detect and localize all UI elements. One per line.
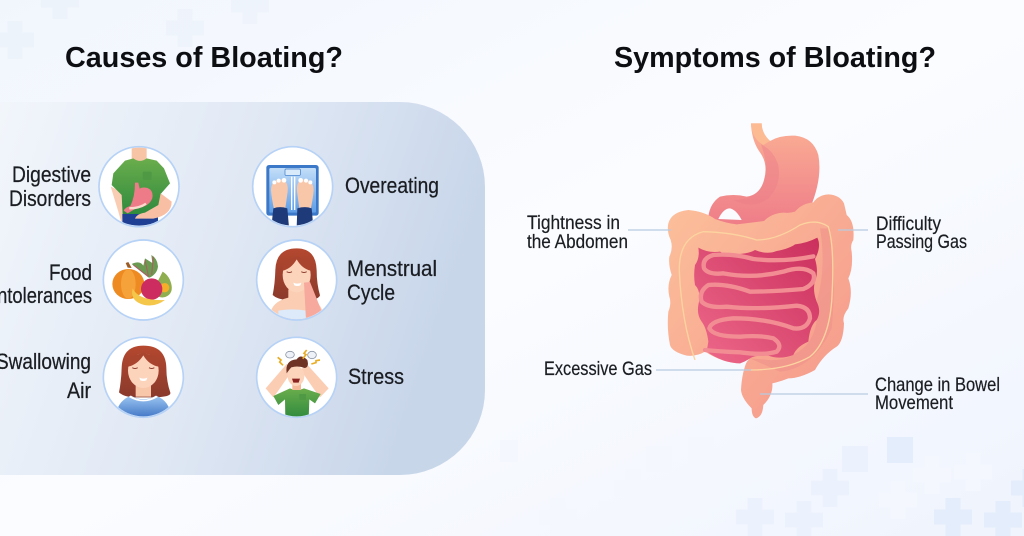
label: menstrual cycle <box>347 256 437 305</box>
small intestine <box>701 255 814 354</box>
label: food intolerances: Food <box>49 260 92 285</box>
large intestine <box>668 194 854 418</box>
panel: causes background <box>0 102 485 475</box>
icon: food <box>103 240 183 320</box>
label: tightness in the abdomen: Tightness in <box>527 212 620 234</box>
heading: causes: Causes of Bloating? <box>65 42 343 74</box>
label: swallowing air <box>0 349 91 403</box>
colon inner shading <box>750 228 834 372</box>
icon: menstrual cycle woman <box>257 240 337 322</box>
label: menstrual cycle: Menstrual <box>347 256 437 281</box>
icon: digestive disorders <box>99 145 179 227</box>
label: digestive disorders <box>9 162 91 211</box>
label: difficulty passing gas: Difficulty <box>876 213 941 235</box>
label: excessive gas: Excessive Gas <box>544 358 652 380</box>
label: difficulty passing gas <box>876 213 967 253</box>
label: menstrual cycle: Cycle <box>347 280 395 305</box>
label: change in bowel movement: Change in Bowel <box>875 374 1000 396</box>
illustration: digestive system <box>668 123 854 418</box>
label: change in bowel movement: Movement <box>875 392 953 414</box>
icon: scale overeating <box>253 147 333 227</box>
label: swallowing air: Air <box>67 378 91 403</box>
label: difficulty passing gas: Passing Gas <box>876 231 967 253</box>
heading: symptoms: Symptoms of Bloating? <box>614 42 936 74</box>
label: digestive disorders: Disorders <box>9 186 91 211</box>
label: digestive disorders: Digestive <box>12 162 91 187</box>
label: stress: Stress <box>348 364 404 389</box>
icon: swallowing air woman <box>103 337 183 418</box>
label: food intolerances <box>0 260 92 308</box>
label: change in bowel movement <box>875 374 1000 414</box>
icon: stress man <box>257 337 337 418</box>
label: tightness in the abdomen: the Abdomen <box>527 231 628 253</box>
taenia stripe <box>679 222 833 370</box>
label: overeating: Overeating <box>345 173 439 198</box>
inner abdomen <box>694 238 819 363</box>
icons: six causes <box>99 145 337 418</box>
label: tightness in the abdomen <box>527 212 628 253</box>
leader lines <box>628 230 868 394</box>
stomach and esophagus <box>708 123 819 228</box>
